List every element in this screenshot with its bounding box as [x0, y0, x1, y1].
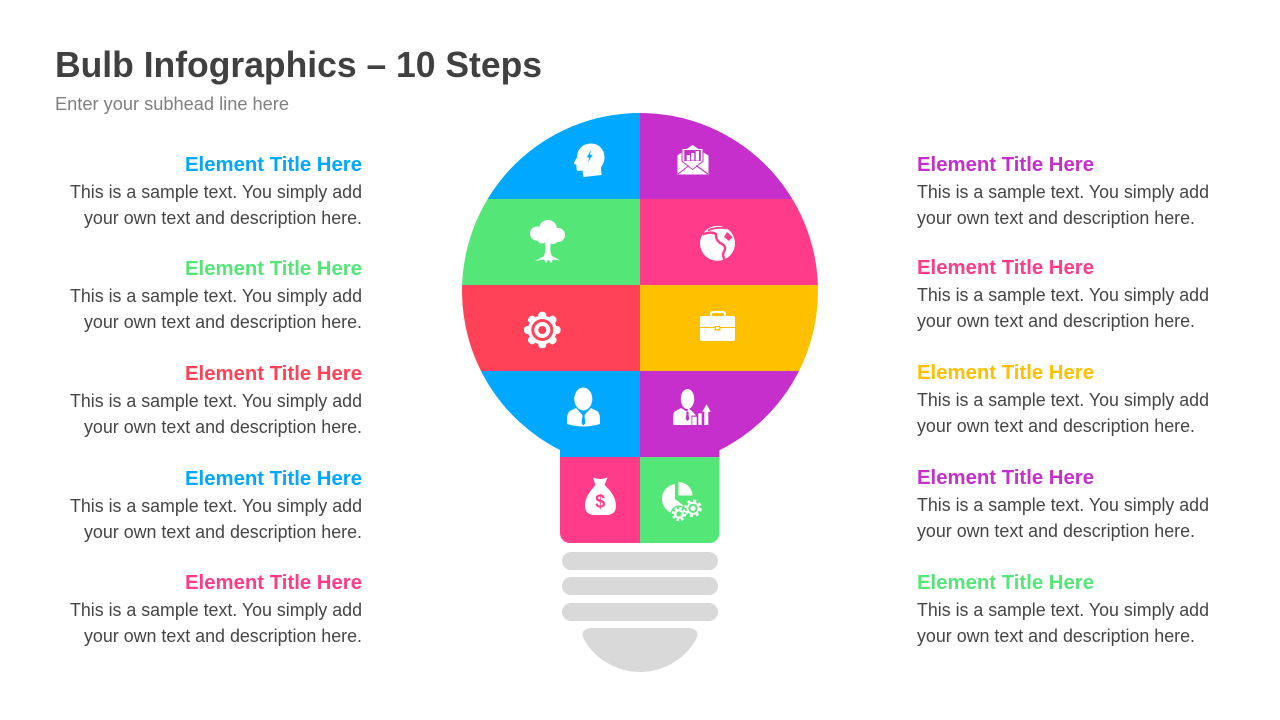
right text block 4	[917, 467, 1209, 541]
right text block 1	[917, 154, 1209, 228]
left text block 3: Element Title Here	[185, 363, 362, 385]
right text block 5: Element Title Here	[917, 572, 1094, 594]
right text block 5	[917, 572, 1209, 646]
left text block 3: This is a sample text. You simply add	[70, 391, 362, 411]
bulb base: screw bands	[562, 552, 718, 621]
right text block 2: This is a sample text. You simply add	[917, 285, 1209, 305]
left text block 4	[70, 468, 362, 542]
left text block 5: Element Title Here	[185, 572, 362, 594]
right text block 2: your own text and description here.	[917, 311, 1195, 331]
right text block 3: your own text and description here.	[917, 416, 1195, 436]
right text block 3: This is a sample text. You simply add	[917, 390, 1209, 410]
icon: envelope with chart	[678, 145, 708, 174]
left text block 2: This is a sample text. You simply add	[70, 286, 362, 306]
left text block 5: This is a sample text. You simply add	[70, 600, 362, 620]
title: Bulb Infographics – 10 Steps	[55, 44, 542, 85]
bulb base: cap	[582, 628, 698, 672]
icon: businessman with growth chart	[673, 389, 711, 425]
icon: money bag: $	[595, 492, 605, 512]
left text block 1: Element Title Here	[185, 154, 362, 176]
bulb coloured segments	[462, 113, 818, 543]
right text block 1: This is a sample text. You simply add	[917, 182, 1209, 202]
left text block 4: Element Title Here	[185, 468, 362, 490]
icon: tree	[530, 220, 565, 263]
right text block 4: Element Title Here	[917, 467, 1094, 489]
left text block 3: your own text and description here.	[84, 417, 362, 437]
left text block 2	[70, 258, 362, 332]
left text block 1: your own text and description here.	[84, 208, 362, 228]
right text block 3: Element Title Here	[917, 362, 1094, 384]
left text block 4: This is a sample text. You simply add	[70, 496, 362, 516]
left text block 1	[70, 154, 362, 228]
right text block 4: your own text and description here.	[917, 521, 1195, 541]
icon: globe	[700, 226, 735, 261]
right text block 5: This is a sample text. You simply add	[917, 600, 1209, 620]
right text block 2	[917, 257, 1209, 331]
icon: head with lightning	[574, 144, 604, 177]
icon: briefcase	[700, 312, 735, 341]
left text block 5	[70, 572, 362, 646]
icon: pie chart with gears	[662, 482, 703, 522]
left text block 1: This is a sample text. You simply add	[70, 182, 362, 202]
right text block 1: Element Title Here	[917, 154, 1094, 176]
left text block 2: your own text and description here.	[84, 312, 362, 332]
right text block 5: your own text and description here.	[917, 626, 1195, 646]
left text block 5: your own text and description here.	[84, 626, 362, 646]
right text block 2: Element Title Here	[917, 257, 1094, 279]
icon: businessman	[567, 388, 600, 426]
right text block 3	[917, 362, 1209, 436]
icon: money bag	[585, 478, 616, 515]
right text block 4: This is a sample text. You simply add	[917, 495, 1209, 515]
subhead: Enter your subhead line here	[55, 93, 289, 114]
icon: gear	[524, 312, 561, 348]
left text block 4: your own text and description here.	[84, 522, 362, 542]
right text block 1: your own text and description here.	[917, 208, 1195, 228]
left text block 2: Element Title Here	[185, 258, 362, 280]
left text block 3	[70, 363, 362, 437]
